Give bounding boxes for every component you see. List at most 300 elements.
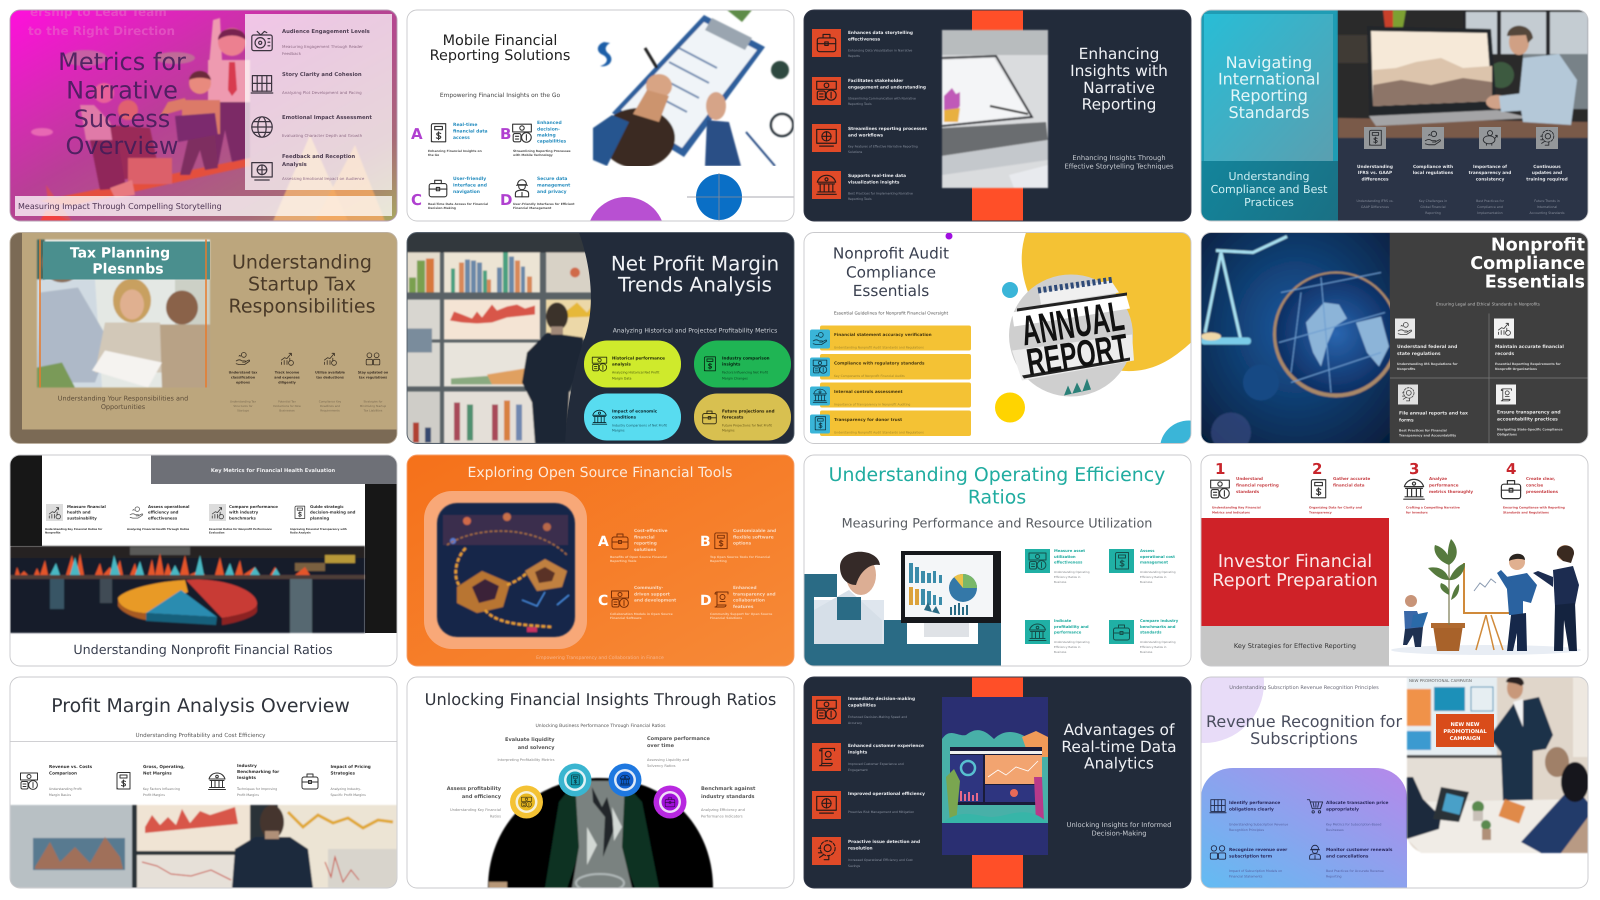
card: Understanding Operating Efficiency Ratios (804, 455, 1191, 666)
item C: User-friendly (453, 177, 486, 182)
label: profitability: Assess profitability (447, 786, 501, 792)
item: profitability: Understanding Operating (1054, 640, 1090, 644)
item: pricing strategies: Analyzing Industry- (330, 787, 361, 791)
card: Net Profit Margin Trends Analysis (407, 232, 794, 444)
item: margins: Key Factors Influencing (143, 787, 180, 791)
item: performance obligations: Identify performance (1229, 801, 1280, 806)
item: revenue over term: Financial Statements (1229, 874, 1263, 878)
title: Real-time Data (1061, 738, 1177, 756)
step 1: Understand (1236, 476, 1263, 481)
item A: financial (634, 534, 655, 540)
item: accountability: Obligations (1497, 432, 1517, 436)
item: transparency: Importance of (1473, 165, 1507, 170)
photo: hands signing a clipboard (593, 10, 793, 168)
title: Compliance (1470, 254, 1585, 274)
item D: Secure data (537, 177, 567, 182)
left teal panel (1201, 10, 1338, 221)
label: compare performance: over time (647, 743, 675, 749)
pill: industry comparison: Margin Changes (722, 376, 748, 380)
item: classification: classification (231, 376, 256, 380)
step 3: metrics thoroughly (1429, 489, 1473, 494)
bar: internal controls: Importance of Transparency in Nonprofit Auditing (834, 402, 910, 406)
step 3: 3 (1409, 460, 1419, 478)
title: Unlocking Financial Insights Through Ratios (425, 690, 776, 709)
item: profitability: Efficiency Ratios in (1054, 645, 1081, 649)
item: performance obligations: obligations clearly (1229, 806, 1274, 812)
item: benchmarking: Industry (237, 763, 257, 768)
pill: historical performance: Historical performance (612, 356, 665, 360)
item: renewals: and cancellations (1326, 853, 1369, 859)
title: Ratios (968, 486, 1026, 508)
item D: Financial Solutions (710, 616, 742, 620)
item D (500, 176, 575, 210)
item A: A (411, 125, 423, 143)
item: strategic planning (290, 504, 356, 534)
item: strategic planning: Guide strategic (310, 504, 344, 509)
item: operational efficiency: Assess operational (148, 504, 190, 509)
item: feedback and reception: Assessing Emotional Impact on Audience (282, 176, 365, 181)
bar: internal controls: Internal controls assessment (834, 389, 903, 394)
node: blue ring (608, 764, 642, 796)
item: industry benchmarks (1109, 618, 1179, 654)
item: income and expenses: Potential Tax (278, 400, 296, 404)
title: Subscriptions (1250, 729, 1358, 748)
item: income and expenses: Businesses (279, 408, 295, 412)
item: cost management (1109, 548, 1176, 584)
subtitle: Analyzing Historical and Projected Profitability Metrics (613, 328, 777, 334)
title: Navigating (1226, 53, 1312, 72)
item B: Streamlining Reporting Processes (513, 149, 571, 153)
item: streamlined workflows: Streamlines reporting processes (848, 127, 927, 132)
shape: purple semicircle (590, 197, 662, 220)
subtitle: Understanding Profitability and Cost Efficiency (136, 732, 266, 739)
item B: Top Open Source Tools for Financial (710, 555, 770, 559)
illustration: team climbing a ramp (31, 18, 385, 221)
item: operational efficiency (127, 504, 190, 531)
item: industry benchmarks: Efficiency Ratios in (1140, 645, 1167, 649)
step 1: standards (1236, 489, 1260, 494)
item: stakeholder engagement: engagement and understanding (848, 84, 926, 90)
item: customer insights: Enhanced customer experience (848, 744, 924, 749)
item: operational efficiency: effectiveness (148, 515, 178, 520)
title: Essentials (853, 282, 929, 300)
bar: accuracy (810, 326, 971, 350)
item: decision-making: Immediate decision-making (848, 697, 915, 702)
bar: accuracy: Understanding Nonprofit Audit Standards and Regulations (834, 346, 924, 350)
item: deductions: Deadlines and (320, 404, 340, 408)
step 4: Standards and Regulations (1503, 510, 1549, 514)
label: benchmark: Analyzing Efficiency and (701, 808, 745, 812)
step 3: Analyze (1429, 476, 1447, 481)
item: renewals: Best Practices for Accurate Revenue (1326, 869, 1384, 873)
item: feedback and reception: Analysis (282, 161, 307, 168)
item: margins: Gross, Operating, (143, 764, 185, 769)
item: continuous updates: Future Trends in (1534, 199, 1560, 203)
step 2: Gather accurate (1333, 476, 1370, 481)
item: renewals: Reporting (1326, 874, 1342, 878)
item: IFRS vs GAAP: differences (1361, 176, 1389, 182)
subtitle: Enhancing Insights Through (1072, 154, 1166, 162)
item: federal regulations: Understand federal and (1397, 345, 1457, 350)
orange guide lines (40, 240, 206, 388)
item: continuous updates: Continuous (1533, 165, 1561, 170)
item: decision-making: Enhanced Decision-Making Speed and (848, 715, 907, 719)
item: local regulations: local regulations (1413, 170, 1454, 176)
icon: film strip (251, 76, 273, 93)
step 1: Understanding Key Financial (1212, 506, 1261, 510)
item: financial records: Maintain accurate financial (1495, 345, 1564, 350)
item: transaction price: appropriately (1326, 806, 1359, 812)
title: Nonprofit (1491, 236, 1585, 256)
item: issue detection: Proactive issue detection and (848, 840, 920, 845)
item: profitability: Business (1054, 650, 1067, 654)
step 1: financial reporting (1236, 482, 1279, 488)
card: Navigating International Reporting Standards (1201, 10, 1588, 221)
photo: presenter and promotional campaign screen (1407, 676, 1589, 853)
item: regulations: Minimizing Startup (360, 404, 386, 408)
subtitle: Ensuring Legal and Ethical Standards in Nonprofits (1436, 302, 1540, 306)
item D: Enhanced (733, 586, 757, 591)
item: revenue over term: Impact of Subscription Models on (1229, 869, 1282, 873)
item D (700, 585, 776, 620)
title: Success (74, 105, 170, 133)
item: deductions: Utilize available (315, 370, 345, 374)
photo: analyst facing wall of charts (407, 232, 597, 444)
item: decision-making (812, 696, 915, 725)
item: pricing strategies: Impact of Pricing (330, 764, 371, 769)
item: pricing strategies: Strategies (330, 770, 356, 776)
item C: Decision-Making (428, 206, 456, 210)
item A (411, 122, 488, 157)
item B: B (700, 534, 711, 550)
footer strip (15, 196, 392, 216)
subtitle: Essential Guidelines for Nonprofit Financial Oversight (834, 310, 948, 316)
title: Metrics for (58, 48, 186, 76)
item: financial records: Essential Reporting Requirements for (1495, 362, 1561, 366)
subtitle: Empowering Financial Insights on the Go (440, 92, 560, 99)
item: customer insights (812, 743, 924, 772)
item: deductions: Compliance Key (319, 400, 342, 404)
item: federal regulations: Understanding IRS Regulations for (1397, 362, 1458, 366)
item: customer insights: Engagement (848, 768, 869, 772)
item: classification (229, 352, 258, 412)
card: Understanding Startup Tax Responsibilities (10, 232, 397, 444)
illustration: analyst at monitor (804, 551, 1001, 666)
item: classification: Structures for (233, 404, 253, 408)
item: operational efficiency: Analyzing Financial Health Through Ratios (127, 528, 190, 531)
item: issue detection: resolution (848, 846, 873, 852)
item D: transparency and (733, 591, 776, 597)
item: income and expenses (273, 353, 301, 412)
item: issue detection: Savings (848, 864, 860, 868)
item: annual reports (1398, 384, 1468, 438)
title: Trends Analysis (617, 272, 772, 296)
item: federal regulations: Nonprofits (1397, 367, 1416, 371)
item A: Real-time (453, 123, 477, 128)
title: Reporting (1230, 86, 1308, 105)
faded background heading: ership to Lead Team (30, 5, 167, 19)
item: financial health: Measure financial (67, 504, 106, 509)
item: real-time visualization (812, 171, 913, 201)
item B: capabilities (537, 138, 567, 144)
item D: D (700, 593, 712, 609)
item: benchmarking: Techniques for Improving (236, 787, 277, 791)
label: liquidity: Interpreting Profitability Metrics (497, 758, 555, 762)
item: transparency: Implementation (1477, 211, 1503, 215)
step 2: Organizing Data for Clarity and (1309, 506, 1362, 510)
bar: donor trust: Transparency for donor trust (834, 417, 902, 422)
grey subtitle block: Key Strategies for Effective Reporting (1234, 642, 1356, 650)
item: asset utilization: Measure asset (1054, 548, 1085, 553)
orange vertical bar (972, 677, 1023, 888)
item: revenue over term: subscription term (1229, 853, 1273, 859)
photo: golden blockchain links (437, 503, 575, 637)
item: transparency (1469, 127, 1511, 215)
item: margins: Profit Margins (143, 793, 165, 797)
title: Mobile Financial (443, 33, 557, 49)
item D: User-Friendly Interfaces for Efficient (513, 202, 575, 206)
step 2: 2 (1312, 460, 1322, 478)
pill: future projections (694, 394, 791, 440)
item: asset utilization: Business (1054, 580, 1067, 584)
item: benchmarking: Insights (237, 775, 256, 780)
item B (500, 120, 571, 157)
photo: laptop with charts (942, 30, 1048, 188)
footer strip: Measuring Impact Through Compelling Storytelling (18, 202, 222, 211)
item: asset utilization: utilization (1054, 554, 1076, 559)
title: Overview (66, 132, 178, 160)
bar: internal controls (810, 382, 971, 408)
item A: Reporting Tools (610, 559, 637, 563)
card: Understanding Nonprofit Financial Ratios (10, 455, 397, 666)
dark curved panel (565, 232, 794, 444)
pill: historical performance: Margin Data (612, 376, 632, 380)
node: purple ring (654, 786, 686, 818)
title: Advantages of (1064, 721, 1174, 739)
bar: donor trust: Understanding Nonprofit Audit Standards and Regulations (834, 430, 924, 434)
step 1 (1211, 460, 1279, 514)
step 4: concise (1526, 482, 1543, 488)
title: Narrative (1083, 79, 1155, 97)
item: industry benchmarks: with industry (229, 510, 259, 515)
item: federal regulations: state regulations (1397, 351, 1441, 357)
item: industry benchmarks: benchmarks and (1140, 624, 1176, 629)
item: annual reports: forms (1399, 418, 1414, 424)
item D: Community Support for Open Source (710, 612, 772, 616)
item: profitability: Indicate (1054, 618, 1071, 623)
item: deductions (315, 353, 346, 412)
black side bands (10, 455, 397, 633)
item: local regulations: Reporting (1425, 211, 1441, 215)
item B: options (733, 541, 752, 547)
photo: scales and globe (1201, 232, 1399, 452)
item: revenue vs costs (20, 764, 93, 797)
item A: A (598, 534, 609, 550)
item: annual reports: Best Practices for Financial (1399, 428, 1447, 432)
item: annual reports: Transparency and Accountability (1399, 434, 1456, 438)
item D: Financial Management (513, 206, 552, 210)
item: performance obligations (1210, 800, 1288, 832)
panel: metrics list (245, 14, 392, 190)
item: real-time visualization: visualization insights (848, 180, 900, 186)
item: classification: Startups (237, 408, 249, 412)
faded background heading: to the Right Direction (28, 24, 175, 38)
pill: historical performance (584, 340, 681, 388)
bar: compliance: Key Components of Nonprofit Financial Audits (834, 374, 905, 378)
item: data storytelling: effectiveness (848, 36, 881, 42)
item: data storytelling (812, 29, 913, 58)
label: benchmark: Benchmark against (701, 786, 755, 792)
item: decision-making: Accuracy (848, 721, 862, 725)
item A: the Go (428, 153, 439, 157)
item D: collaboration (733, 598, 765, 604)
item B: B (500, 125, 511, 143)
pill: industry comparison: Factors Influencing Net Profit (722, 370, 769, 374)
item: classification: Understanding Tax (230, 400, 256, 404)
pill: historical performance: analysis (612, 362, 631, 366)
item: operational efficiency: efficiency and (148, 510, 179, 515)
item: local regulations: Key Challenges in (1419, 199, 1447, 203)
item: cost management: Assess (1140, 548, 1155, 553)
item: financial health (45, 504, 106, 534)
item: regulations (358, 353, 389, 412)
step 4 (1501, 460, 1565, 514)
card: Investor Financial Report Preparation (1201, 455, 1588, 666)
item: transaction price (1307, 800, 1389, 832)
photo header band (43, 242, 210, 280)
item: data storytelling: Enhancing Data Visualization in Narrative (848, 48, 912, 52)
title: Analytics (1084, 754, 1154, 772)
subtitle: Effective Storytelling Techniques (1064, 162, 1174, 170)
item D: D (500, 191, 512, 209)
item A: Cost-effective (634, 529, 668, 534)
item: stakeholder engagement: Reporting Tools (848, 102, 872, 106)
item: performance obligations: Recognition Principles (1229, 828, 1264, 832)
subtitle: Decision-Making (1092, 830, 1146, 838)
item: strategic planning: planning (310, 515, 329, 520)
title: Understanding Operating Efficiency (829, 464, 1165, 486)
item A: Enhancing Financial Insights on (428, 149, 482, 153)
title: International (1218, 70, 1320, 88)
pill: economic conditions: Margins (612, 428, 625, 432)
card: Mobile Financial Reporting Solutions (411, 10, 794, 220)
title: Net Profit Margin (611, 252, 779, 276)
card: Nonprofit Audit Compliance Essentials (804, 232, 1218, 476)
item: transaction price: Key Metrics for Subscription-Based (1326, 822, 1381, 826)
item: streamlined workflows (812, 124, 928, 154)
item A: access (453, 136, 470, 141)
item: renewals (1310, 845, 1393, 878)
item: deductions: Requirements (320, 408, 340, 412)
item C: Collaboration Models in Open Source (610, 612, 673, 616)
item: IFRS vs GAAP: Understanding (1357, 165, 1393, 170)
item: cost management: operational cost (1140, 554, 1175, 559)
item D: management (537, 182, 571, 188)
item: local regulations: Compliance with (1413, 165, 1453, 170)
panel: gradient (1201, 768, 1407, 888)
item: financial health: Nonprofits (45, 532, 61, 534)
title: Compliance (846, 264, 936, 282)
icon: monitor (252, 163, 272, 180)
item: issue detection: Increased Operational Efficiency and Cost (848, 858, 914, 862)
item: streamlined workflows: Key Features of Effective Narrative Reporting (848, 144, 918, 148)
label: benchmark: Performance Indicators (701, 814, 743, 818)
card: Advantages of Real-time Data Analytics (804, 677, 1191, 888)
pill: future projections: Future projections and (722, 408, 775, 414)
red title block: Report Preparation (1212, 571, 1378, 591)
item C: and development (634, 598, 676, 604)
grey header: Key Metrics for Financial Health Evaluation (211, 468, 335, 474)
step 4: Ensuring Compliance with Reporting (1503, 506, 1565, 510)
item A (598, 528, 668, 563)
item: data storytelling: Enhances data storytelling (848, 31, 913, 36)
item: real-time visualization: Best Practices for Implementing Narrative (848, 192, 913, 196)
item: benchmarking: Benchmarking for (237, 769, 280, 774)
item C: driven support (634, 591, 670, 597)
step 2: Transparency (1309, 510, 1332, 514)
item: accountability: Ensure transparency and (1497, 410, 1561, 416)
item: continuous updates (1526, 127, 1568, 215)
node: yellow ring (510, 786, 543, 818)
title: Understanding Nonprofit Financial Ratios (73, 642, 333, 657)
item: pricing strategies: Specific Profit Margins (330, 793, 366, 797)
step 1: Metrics and Indicators (1212, 510, 1250, 514)
subtitle: Opportunities (101, 403, 146, 411)
item: revenue vs costs: Revenue vs. Costs (49, 764, 92, 769)
item: benchmarking (208, 763, 280, 797)
item: industry benchmarks: Essential Ratios for Nonprofit Performance (209, 528, 272, 531)
pill: economic conditions: conditions (612, 414, 637, 420)
shape: dots (946, 232, 1218, 476)
title: Essentials (1485, 272, 1585, 292)
label: liquidity: Evaluate liquidity (505, 737, 554, 743)
photo: presenter and promotional campaign screen: NEW NEW (1450, 722, 1480, 728)
title: Nonprofit Audit (833, 244, 949, 262)
pill: future projections: forecasts (722, 414, 744, 420)
title: Reporting Solutions (430, 48, 570, 64)
item B: making (537, 132, 556, 138)
title: Understanding (232, 252, 372, 274)
node: teal ring (558, 764, 592, 796)
step 3: for Investors (1406, 510, 1428, 514)
label: compare performance: Assessing Liquidity and (647, 758, 689, 762)
item: transparency: Best Practices for (1476, 199, 1505, 203)
label: compare performance: Solvency Ratios (647, 764, 676, 768)
photo: presenter and promotional campaign screen: CAMPAIGN (1450, 736, 1480, 742)
item: transaction price: Businesses (1326, 828, 1344, 832)
item: financial records: Nonprofit Organizations (1495, 367, 1537, 371)
item: industry benchmarks (209, 504, 278, 534)
photo: presenter and promotional campaign screen: PROMOTIONAL (1443, 729, 1487, 735)
shape: lilac circle (1144, 623, 1264, 743)
item: emotional impact: Evaluating Character Depth and Growth (282, 133, 363, 138)
label: profitability: and efficiency (462, 794, 502, 800)
item C: navigation (453, 189, 480, 195)
item: IFRS vs GAAP: IFRS vs. GAAP (1358, 170, 1392, 176)
step 4: Create clear, (1526, 476, 1555, 481)
subtitle: Unlocking Business Performance Through Financial Ratios (536, 723, 666, 729)
red title block (1201, 518, 1389, 626)
pill: historical performance: Analyzing Historical Net Profit (612, 370, 660, 374)
item B: Reporting (710, 559, 727, 563)
step 4: 4 (1506, 460, 1516, 478)
subtitle: Compliance and Best (1211, 183, 1328, 196)
item: industry benchmarks: benchmarks (229, 515, 256, 520)
photo: advisers at a desk (37, 240, 210, 388)
item: federal regulations (1395, 318, 1458, 371)
pill: industry comparison: insights (722, 362, 741, 366)
photo: 3D pie chart on a data floor (10, 546, 365, 633)
